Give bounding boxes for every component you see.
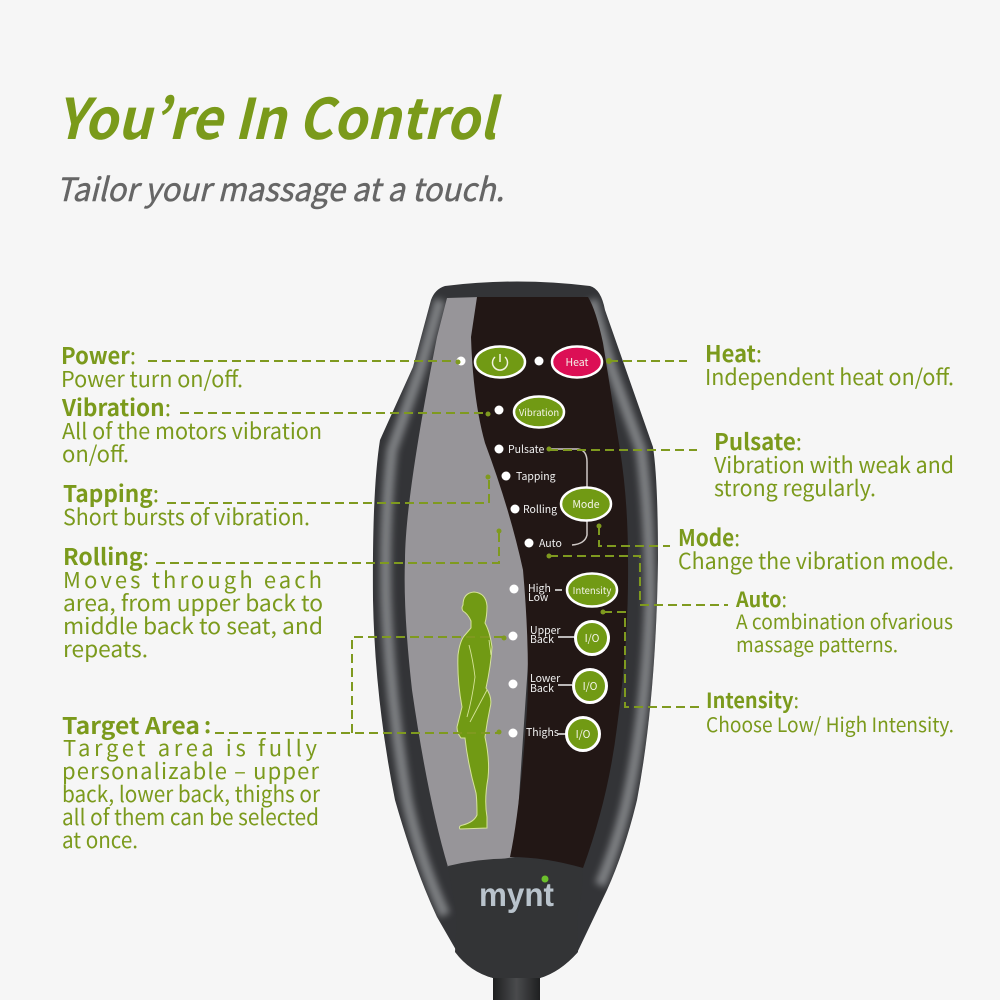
callout: tapping: Tapping: [63, 475, 159, 509]
callout: target area: : [204, 708, 211, 740]
upper back control [508, 622, 608, 654]
callout: auto: A combination ofvarious [736, 606, 953, 635]
mode group: Mode [572, 497, 600, 512]
callout: target area: Target area is fully [63, 731, 318, 763]
dark panel [471, 297, 628, 868]
lower back control: Back [530, 681, 554, 696]
human figure [457, 592, 492, 829]
connector lines [549, 449, 587, 545]
mode group: Tapping [516, 469, 556, 484]
lower back control: I/O [583, 679, 598, 694]
callout: pulsate: strong regularly. [714, 471, 876, 503]
callout: heat [705, 335, 954, 392]
thighs control [508, 718, 600, 750]
callout: heat: Heat: [705, 335, 762, 369]
subtitle: Tailor your massage at a touch. [56, 165, 504, 211]
upper back control: I/O [585, 631, 600, 646]
callout: target area: all of them can be selected [62, 800, 319, 832]
heat button: Heat [565, 355, 589, 370]
upper back control: Upper [530, 623, 561, 638]
callout: rolling [63, 538, 323, 664]
callout: rolling: Moves through each [63, 563, 322, 595]
callout: vibration: All of the motors vibration [62, 414, 322, 446]
cable [493, 976, 540, 1000]
grey panel [405, 297, 535, 867]
callout: tapping: Short bursts of vibration. [63, 500, 310, 532]
callout: rolling: repeats. [63, 632, 148, 664]
lower back control: Lower [530, 671, 561, 686]
power button [456, 346, 525, 378]
mode group: Pulsate [508, 442, 544, 457]
callout: rolling: area, from upper back to [63, 586, 323, 618]
callout: target area [62, 707, 320, 855]
callout: power: Power: [61, 337, 136, 371]
intensity control [510, 574, 617, 606]
intensity control: Low [528, 590, 549, 605]
thighs control: I/O [576, 727, 591, 742]
callout: rolling: middle back to seat, and [63, 609, 323, 641]
callout: rolling: Rolling: [63, 538, 149, 572]
callout: tapping [63, 475, 310, 532]
callout: vibration [61, 389, 322, 469]
remote control [360, 270, 670, 1000]
callout: target area: Target Area [62, 707, 200, 741]
mode group [494, 442, 611, 551]
mode group: Auto [539, 536, 562, 551]
callout: auto [735, 584, 953, 658]
mode group: Rolling [523, 502, 557, 517]
callout: pulsate: Vibration with weak and [714, 448, 954, 480]
leader lines [148, 358, 728, 734]
callout: power [61, 337, 243, 394]
vibration button: Vibration [519, 405, 559, 419]
callout: target area: personalizable – upper [62, 754, 319, 786]
callout: mode: Change the vibration mode. [678, 544, 954, 576]
callout: auto: Auto: [735, 584, 787, 614]
upper back control: Back [530, 632, 554, 647]
callout: heat: Independent heat on/off. [705, 360, 954, 392]
callout: pulsate [714, 423, 954, 503]
callout: power: Power turn on/off. [61, 362, 243, 394]
callout: mode: Mode: [678, 519, 740, 553]
logo: mynt [479, 876, 554, 913]
intensity control: High [528, 581, 551, 596]
vibration button [494, 396, 564, 428]
intensity control: Intensity [573, 583, 611, 597]
callout: mode [678, 519, 954, 576]
callout: pulsate: Pulsate: [714, 423, 802, 457]
title: You’re In Control [56, 75, 502, 156]
callout: intensity [706, 685, 954, 738]
remote body [372, 282, 658, 978]
thighs control: Thighs [526, 725, 559, 740]
callout: vibration: on/off. [62, 437, 129, 469]
bottom cap [448, 858, 583, 978]
callout: target area: at once. [62, 823, 138, 855]
callout: vibration: Vibration: [61, 389, 171, 423]
callout: auto: massage patterns. [736, 629, 898, 658]
callout: intensity: Choose Low/ High Intensity. [706, 709, 954, 738]
callout: intensity: Intensity: [706, 685, 799, 715]
lower back control [508, 670, 606, 702]
heat button [534, 346, 602, 378]
callout: target area: back, lower back, thighs or [62, 777, 320, 809]
